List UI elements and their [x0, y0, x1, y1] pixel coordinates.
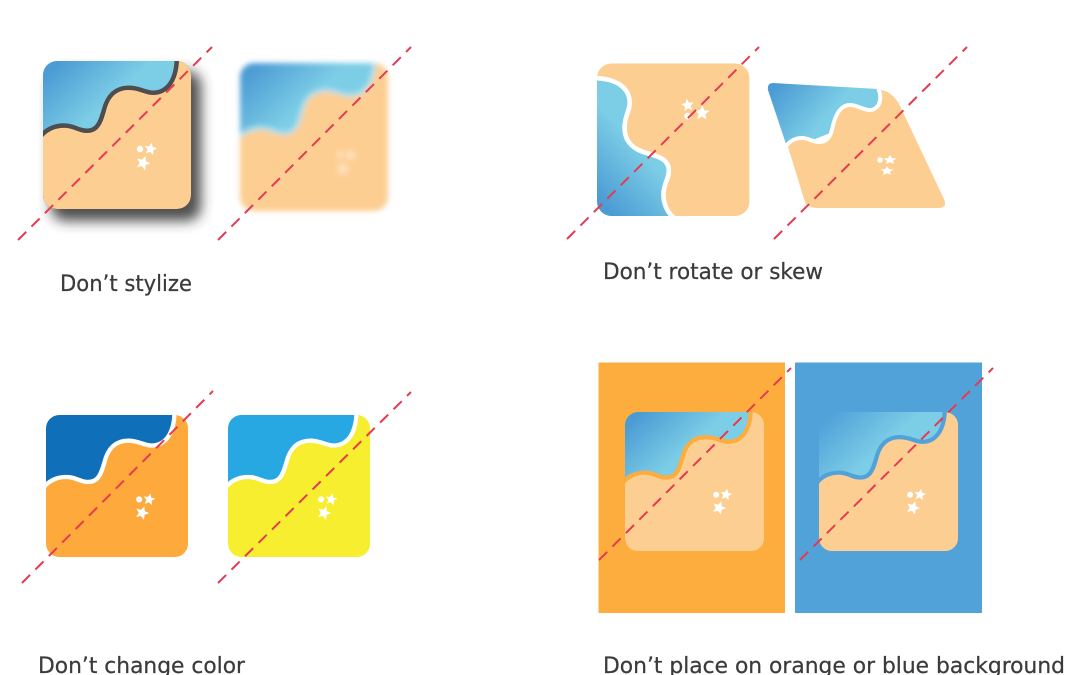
strike line — [18, 47, 212, 240]
blurred logo — [240, 63, 388, 211]
logo on orange — [625, 412, 764, 551]
logo on blue — [819, 412, 958, 551]
logo in cyan and yellow — [228, 415, 370, 557]
strike line — [800, 368, 993, 560]
logo with drop shadow — [43, 61, 201, 221]
panel: don't rotate or skew — [567, 47, 967, 285]
logo in dark blue and orange — [46, 415, 188, 557]
strike line — [774, 47, 967, 239]
strike line — [22, 391, 213, 583]
strike line — [218, 392, 411, 583]
strike line — [218, 47, 411, 240]
panel: don't stylize — [18, 47, 411, 297]
caption: don't rotate or skew: Don’t rotate or skew — [603, 260, 823, 285]
panel: don't change color — [22, 391, 411, 675]
rotated logo — [597, 64, 749, 216]
skewed logo — [768, 83, 945, 208]
strike line — [567, 47, 759, 239]
orange background — [598, 362, 785, 613]
caption: don't stylize: Don’t stylize — [60, 272, 192, 297]
strike line — [599, 368, 791, 560]
blue background — [795, 362, 982, 613]
panel: don't place on orange or blue background — [598, 362, 1065, 675]
